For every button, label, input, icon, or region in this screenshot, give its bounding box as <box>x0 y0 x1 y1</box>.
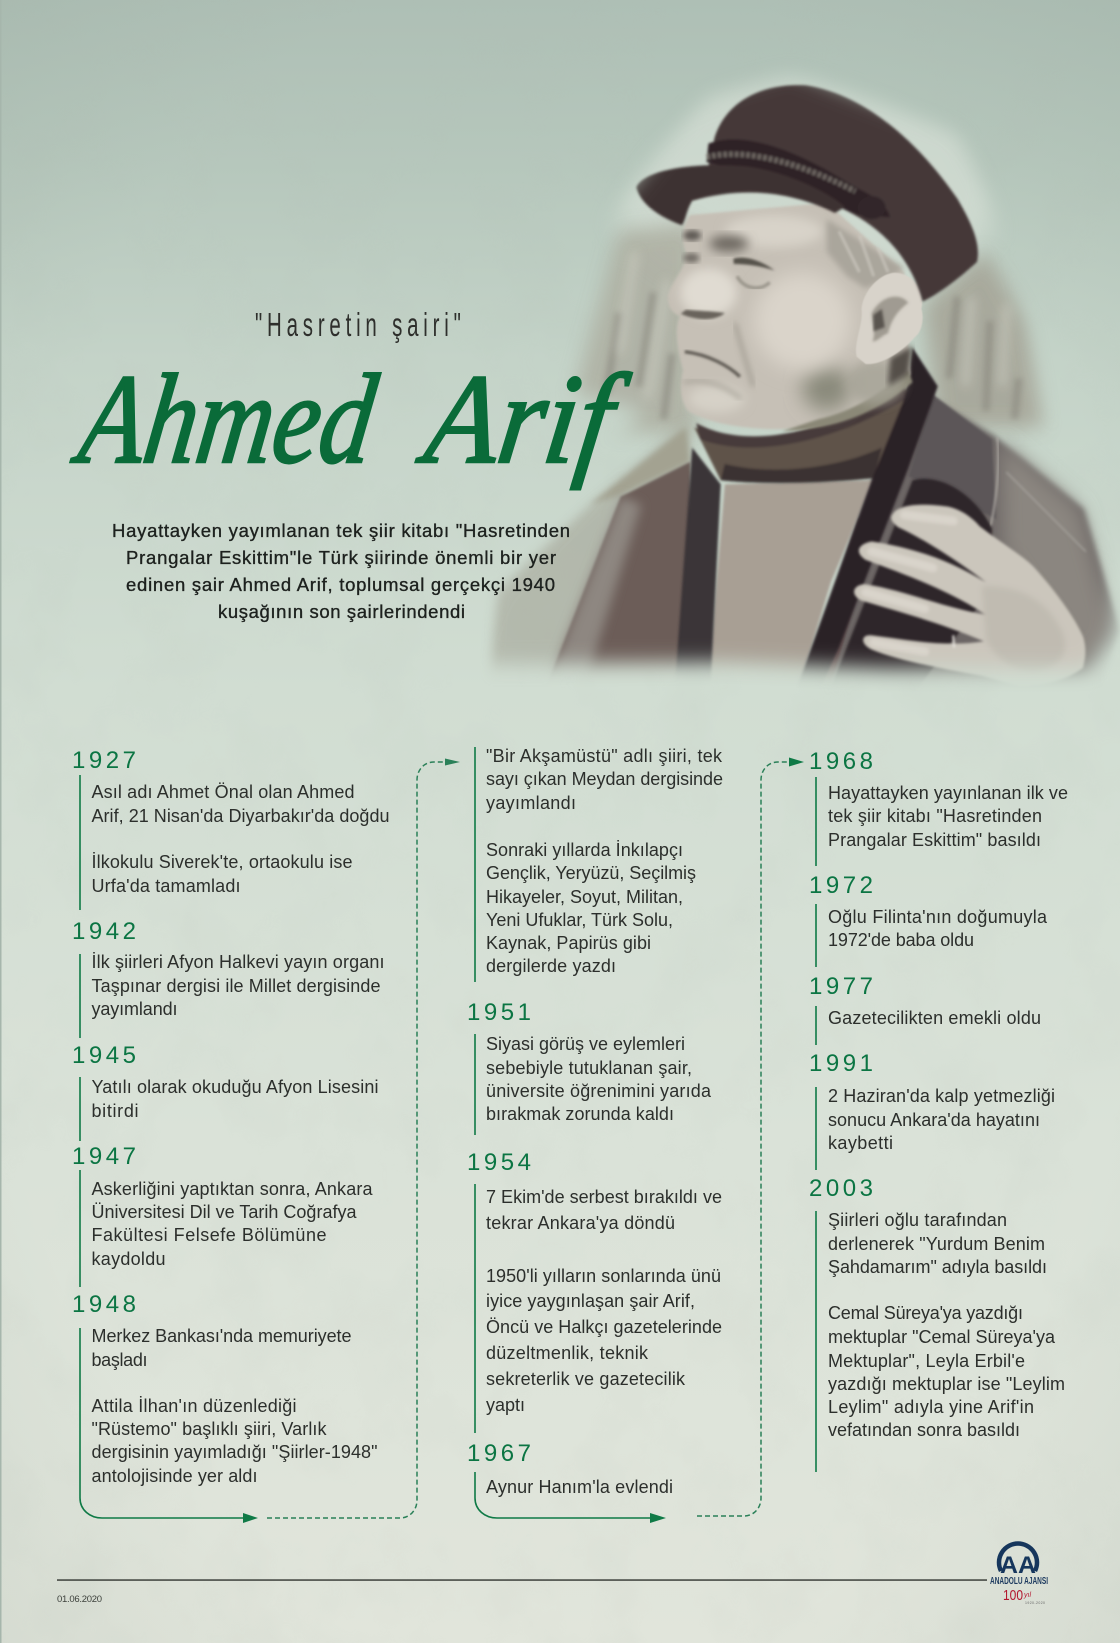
entry 1948: 1948 <box>72 1291 136 1318</box>
sweater <box>711 480 870 676</box>
entry 1927: Arif, 21 Nisan'da Diyarbakır'da doğdu <box>92 806 390 826</box>
entry 2003: Cemal Süreya'ya yazdığı <box>828 1303 1023 1323</box>
entry 1948: başladı <box>92 1350 148 1370</box>
entry 2003: Leylim" adıyla yine Arif'in <box>828 1397 1034 1417</box>
entry 1927: İlkokulu Siverek'te, ortaokulu ise <box>92 852 352 872</box>
entry 1942 <box>72 918 384 1038</box>
kicker: Hasretin şairi: "Hasretin şairi" <box>255 306 461 343</box>
entry 1950 continued: Kaynak, Papirüs gibi <box>486 933 651 953</box>
title: Ahmed Arif <box>66 348 636 490</box>
entry 2003: mektuplar "Cemal Süreya'ya <box>828 1327 1056 1347</box>
entry 1947: kaydoldu <box>92 1249 166 1269</box>
entry 2003: 2003 <box>809 1175 873 1202</box>
entry 1950 continued: sayı çıkan Meydan dergisinde <box>486 769 723 789</box>
entry 1967 <box>467 1440 673 1497</box>
entry 1968 <box>809 748 1068 866</box>
entry 1948 <box>72 1291 378 1486</box>
entry 1951: Siyasi görüş ve eylemleri <box>486 1034 685 1054</box>
entry 1954: Öncü ve Halkçı gazetelerinde <box>486 1317 722 1337</box>
entry 1972 <box>809 872 1048 967</box>
entry 1927: Urfa'da tamamladı <box>92 876 240 896</box>
entry 1977: Gazetecilikten emekli oldu <box>828 1008 1041 1028</box>
entry 1950 continued: Hikayeler, Soyut, Militan, <box>486 887 683 907</box>
entry 1972: Oğlu Filinta'nın doğumuyla <box>828 907 1048 927</box>
entry 1968: Hayattayken yayınlanan ilk ve <box>828 783 1068 803</box>
hand <box>854 505 1085 687</box>
entry 1947: Askerliğini yaptıktan sonra, Ankara <box>92 1179 373 1199</box>
footer rule <box>57 1579 987 1581</box>
entry 1977: 1977 <box>809 973 873 1000</box>
entry 1942: 1942 <box>72 918 136 945</box>
cap <box>636 85 978 302</box>
hair <box>827 219 912 386</box>
entry 2003 <box>809 1175 1065 1472</box>
entry 1991: kaybetti <box>828 1133 893 1153</box>
entry 2003: derlenerek "Yurdum Benim <box>828 1234 1045 1254</box>
entry 1967: Aynur Hanım'la evlendi <box>486 1477 673 1497</box>
entry 1950 continued: yayımlandı <box>486 793 576 813</box>
entry 1951: 1951 <box>467 999 531 1026</box>
intro paragraph: Prangalar Eskittim"le Türk şiirinde önemli bir yer <box>126 547 556 568</box>
entry 1977 <box>809 973 1041 1045</box>
entry 1950 continued: dergilerde yazdı <box>486 956 616 976</box>
coat <box>488 394 1120 684</box>
ear <box>856 273 923 364</box>
timeline column 1 <box>72 747 390 1486</box>
Anadolu Ajansi logo <box>990 1544 1048 1605</box>
entry 1968: tek şiir kitabı "Hasretinden <box>828 806 1042 826</box>
Anadolu Ajansi logo: ANADOLU AJANSI <box>990 1576 1048 1587</box>
entry 1948: dergisinin yayımladığı "Şiirler-1948" <box>92 1442 378 1462</box>
entry 1972: 1972'de baba oldu <box>828 930 974 950</box>
entry 1954: 1950'li yılların sonlarında ünü <box>486 1266 721 1286</box>
entry 1991: 2 Haziran'da kalp yetmezliği <box>828 1086 1055 1106</box>
entry 1942: Taşpınar dergisi ile Millet dergisinde <box>92 976 380 996</box>
entry 1947: Üniversitesi Dil ve Tarih Coğrafya <box>92 1202 357 1222</box>
Anadolu Ajansi logo: 100 <box>1003 1587 1023 1604</box>
entry 1954: 1954 <box>467 1149 531 1176</box>
entry 1927: Asıl adı Ahmet Önal olan Ahmed <box>92 782 354 802</box>
entry 1951 <box>467 999 712 1135</box>
entry 1967: 1967 <box>467 1440 531 1467</box>
entry 1945 <box>72 1042 378 1141</box>
entry 1927: 1927 <box>72 747 136 774</box>
arrow from column 1 to column 2 <box>80 758 460 1523</box>
entry 1968: 1968 <box>809 748 873 775</box>
entry 1945: 1945 <box>72 1042 136 1069</box>
Anadolu Ajansi logo: yıl <box>1023 1592 1031 1599</box>
entry 1927 <box>72 747 390 910</box>
intro paragraph: edinen şair Ahmed Arif, toplumsal gerçekçi 1940 <box>126 574 555 595</box>
date: 01.06.2020 <box>57 1594 102 1605</box>
entry 1972: 1972 <box>809 872 873 899</box>
entry 1954: yaptı <box>486 1395 525 1415</box>
entry 1950 continued: Yeni Ufuklar, Türk Solu, <box>486 910 673 930</box>
entry 1951: bırakmak zorunda kaldı <box>486 1104 674 1124</box>
intro paragraph <box>112 520 570 622</box>
entry 1968: Prangalar Eskittim" basıldı <box>828 830 1041 850</box>
entry 1954: düzeltmenlik, teknik <box>486 1343 649 1363</box>
Anadolu Ajansi logo: AA <box>1000 1552 1036 1579</box>
entry 1947: 1947 <box>72 1143 136 1170</box>
entry 2003: Mektuplar", Leyla Erbil'e <box>828 1351 1025 1371</box>
entry 1991 <box>809 1050 1055 1170</box>
entry 1951: üniversite öğrenimini yarıda <box>486 1081 712 1101</box>
entry 1948: antolojisinde yer aldı <box>92 1466 258 1486</box>
entry 1954: sekreterlik ve gazetecilik <box>486 1369 686 1389</box>
entry 1950 continued <box>475 746 723 982</box>
Anadolu Ajansi logo: 1920-2020 <box>1025 1601 1045 1605</box>
entry 1947 <box>72 1143 373 1287</box>
arrow from column 2 to column 3 <box>475 758 804 1523</box>
intro paragraph: Hayattayken yayımlanan tek şiir kitabı "Hasretinden <box>112 520 570 541</box>
intro paragraph: kuşağının son şairlerindendi <box>218 601 465 622</box>
entry 1950 continued: Gençlik, Yeryüzü, Seçilmiş <box>486 863 696 883</box>
entry 1950 continued: Sonraki yıllarda İnkılapçı <box>486 840 683 860</box>
timeline column 3 <box>809 748 1068 1472</box>
entry 2003: yazdığı mektuplar ise "Leylim <box>828 1374 1065 1394</box>
portrait illustration of Ahmed Arif <box>488 72 1120 729</box>
entry 1948: Attila İlhan'ın düzenlediği <box>92 1396 296 1416</box>
face and neck <box>668 203 912 431</box>
scarf <box>676 347 940 680</box>
halo and reeds behind the figure <box>566 72 1043 435</box>
title: Ahmed Arif: Ahmed <box>66 348 385 490</box>
entry 1951: sebebiyle tutuklanan şair, <box>486 1058 692 1078</box>
entry 1954: tekrar Ankara'ya döndü <box>486 1213 675 1233</box>
entry 1948: "Rüstemo" başlıklı şiiri, Varlık <box>92 1419 328 1439</box>
entry 1945: Yatılı olarak okuduğu Afyon Lisesini <box>92 1077 378 1097</box>
entry 1942: İlk şiirleri Afyon Halkevi yayın organı <box>92 952 384 972</box>
entry 1954: 7 Ekim'de serbest bırakıldı ve <box>486 1187 722 1207</box>
entry 1954 <box>467 1149 722 1433</box>
entry 1950 continued: "Bir Akşamüstü" adlı şiiri, tek <box>486 746 723 766</box>
entry 2003: vefatından sonra basıldı <box>828 1420 1020 1440</box>
entry 2003: Şahdamarım" adıyla basıldı <box>828 1257 1047 1277</box>
entry 1945: bitirdi <box>92 1101 138 1121</box>
entry 1991: 1991 <box>809 1050 873 1077</box>
entry 1947: Fakültesi Felsefe Bölümüne <box>92 1225 326 1245</box>
timeline column 2 <box>467 746 723 1497</box>
title: Ahmed Arif: Arif <box>411 348 636 490</box>
entry 1991: sonucu Ankara'da hayatını <box>828 1110 1040 1130</box>
entry 2003: Şiirleri oğlu tarafından <box>828 1210 1007 1230</box>
entry 1948: Merkez Bankası'nda memuriyete <box>92 1326 352 1346</box>
entry 1942: yayımlandı <box>92 999 178 1019</box>
entry 1954: iyice yaygınlaşan şair Arif, <box>486 1291 695 1311</box>
